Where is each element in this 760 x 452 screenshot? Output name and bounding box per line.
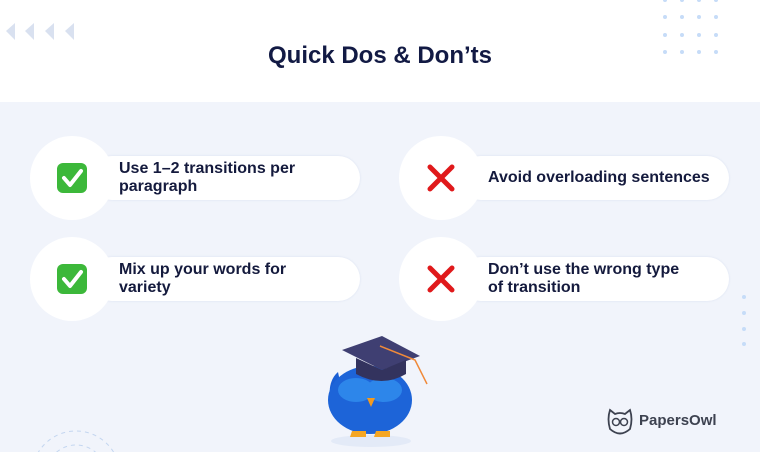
item: do 2: Mix up your words for <box>119 261 286 278</box>
item: dont 2: of transition <box>488 279 580 296</box>
icon: cross <box>428 266 454 292</box>
item: dont 1: Avoid overloading sentences <box>488 169 710 186</box>
owl mascot <box>328 336 428 447</box>
logo: PapersOwl: PapersOwl <box>639 412 717 429</box>
item: do 1: Use 1–2 transitions per <box>119 160 295 177</box>
icon: check <box>57 163 87 193</box>
header band <box>0 0 760 102</box>
logo: PapersOwl <box>608 408 717 434</box>
item: do 1: paragraph <box>119 178 197 195</box>
icon: cross <box>428 164 454 192</box>
item: do 2: variety <box>119 279 171 296</box>
item: do 2 <box>30 237 360 321</box>
item: dont 1 <box>399 136 730 220</box>
title: Quick Dos & Don’ts <box>268 42 492 69</box>
decorative arrows <box>6 23 74 40</box>
item: dont 2: Don’t use the wrong type <box>488 261 679 278</box>
item: do 1 <box>30 136 360 220</box>
item: dont 2 <box>399 237 730 321</box>
icon: check <box>57 264 87 294</box>
